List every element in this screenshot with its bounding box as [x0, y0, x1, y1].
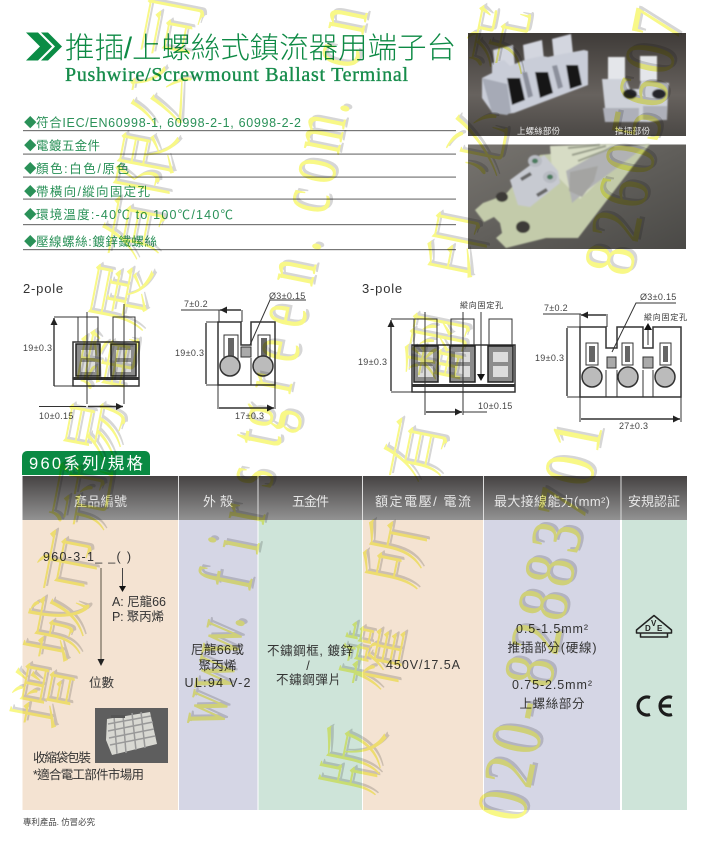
- column: housing: 尼龍66或: [191, 642, 244, 657]
- column: metal parts: [258, 520, 362, 810]
- material codes: [112, 594, 166, 624]
- panel: feature list: [23, 115, 456, 250]
- feature: plating: [23, 138, 456, 155]
- column: metal parts: 不鏽鋼彈片: [276, 672, 341, 687]
- arrow: to pole count: [98, 568, 104, 666]
- drawing: 2-pole front view: [23, 304, 139, 421]
- feature: standards: [23, 115, 456, 131]
- title: 推插/上螺絲式鎮流器用端子台: [65, 32, 456, 65]
- heading: 3-pole: 3-pole: [362, 281, 403, 296]
- feature: plating: 電鍍五金件: [36, 138, 100, 153]
- tab: series heading: 960系列/規格: [29, 454, 144, 473]
- column: wire capacity: 上螺絲部分: [520, 696, 585, 711]
- column: wire capacity: 0.75-2.5mm²: [512, 678, 592, 692]
- feature: screws: 壓線螺絲:鍍鋅鐵螺絲: [36, 234, 157, 249]
- watermark: company name: 增城市冠易電展有限公司: [6, 0, 220, 734]
- feature: colour: ◆: [24, 161, 37, 176]
- table header: 五金件: [292, 494, 329, 509]
- 3-pole terminal: [482, 34, 588, 115]
- table header: [22, 476, 687, 520]
- feature: fixing holes: 帶橫向/縱向固定孔: [36, 184, 150, 199]
- icon: VDE mark: [636, 616, 672, 637]
- dimension: height: 19±0.3: [175, 348, 204, 358]
- column: wire capacity: 推插部分(硬線): [508, 640, 596, 655]
- dimension: height: 19±0.3: [358, 357, 387, 367]
- footer note: 專利產品. 仿冒必究: [23, 817, 95, 827]
- column: safety approvals: [622, 520, 687, 810]
- icon: VDE mark: D: [645, 624, 651, 633]
- label: vertical fixing hole: 縱向固定孔: [460, 300, 503, 310]
- feature: screws: [23, 234, 456, 250]
- column: wire capacity: [484, 520, 620, 810]
- watermark: telephone: 020-82883701: [465, 413, 622, 825]
- dimension: total width: 27±0.3: [619, 421, 648, 431]
- watermark: second telephone: 82605607: [569, 3, 699, 281]
- packing note: 收縮袋包裝: [33, 750, 91, 765]
- table header: 最大接線能力(mm²): [494, 494, 610, 509]
- watermark: website: www.firstgreen.com.cn: [158, 0, 389, 732]
- feature: standards: ◆: [24, 115, 37, 130]
- dimension: width: 7±0.2: [544, 303, 568, 313]
- material codes: P: 聚丙烯: [112, 610, 164, 624]
- watermark: telephone: 020-82883701: [462, 415, 619, 827]
- watermark: website: www.firstgreen.com.cn: [155, 0, 386, 734]
- icon: CE mark: [638, 697, 672, 715]
- dimension: hole: Ø3±0.15: [269, 291, 306, 301]
- drawing: 3-pole front view: [358, 300, 515, 415]
- watermark: company name: 增城市冠易電展有限公司: [3, 0, 217, 736]
- feature: standards: 符合IEC/EN60998-1, 60998-2-1, 60998-2-2: [36, 115, 301, 130]
- dimension: height: 19±0.3: [23, 343, 52, 353]
- dimension: height: 19±0.3: [535, 353, 564, 363]
- column: wire capacity: 0.5-1.5mm²: [516, 622, 588, 636]
- column: rating: 450V/17.5A: [386, 658, 461, 672]
- column: housing: 聚丙烯: [198, 659, 236, 673]
- table header: 安規認証: [628, 494, 680, 509]
- label: vertical fixing hole: 縱向固定孔: [644, 312, 687, 322]
- watermark: second telephone: 82605607: [572, 1, 702, 279]
- feature: colour: [23, 161, 456, 178]
- feature: screws: ◆: [24, 234, 37, 249]
- feature: fixing holes: [23, 184, 456, 200]
- column: part number: [22, 520, 178, 810]
- column: housing: UL:94 V-2: [184, 676, 251, 690]
- table header: 外 殼: [203, 494, 233, 509]
- icon: VDE mark: E: [657, 624, 663, 633]
- column: metal parts: 不鏽鋼框, 鍍鋅: [267, 643, 353, 658]
- feature: temperature: [23, 207, 456, 225]
- drawing: 2-pole side view: [175, 291, 306, 421]
- feature: temperature: ◆: [24, 207, 37, 222]
- feature: plating: ◆: [24, 138, 37, 153]
- drawing: 3-pole side view: [535, 292, 687, 431]
- feature: temperature: 環境溫度:-40℃ to 100℃/140℃: [36, 207, 233, 222]
- photo: terminals: [468, 33, 686, 136]
- tab: series heading: [22, 451, 150, 475]
- icon: title chevrons: [26, 32, 62, 60]
- dimension: pitch: 10±0.15: [39, 411, 74, 421]
- subtitle: Pushwire/Screwmount Ballast Terminal: [65, 64, 408, 86]
- part number code: 960-3-1_ _( ): [43, 550, 131, 564]
- dimension: total width: 17±0.3: [235, 411, 264, 421]
- pole count label: 位數: [89, 675, 115, 690]
- table: specifications: [22, 476, 687, 810]
- icon: VDE mark: V: [651, 619, 657, 628]
- feature: fixing holes: ◆: [24, 184, 37, 199]
- dimension: hole: Ø3±0.15: [640, 292, 677, 302]
- 2-pole terminal: [602, 56, 669, 122]
- dimension: pitch: 10±0.15: [478, 401, 513, 411]
- column: metal parts: /: [306, 659, 310, 673]
- photo caption: push-in: 推插部份: [615, 126, 650, 136]
- feature: colour: 顏色:白色/原色: [36, 161, 129, 176]
- dimension: width: 7±0.2: [184, 299, 208, 309]
- table header: 額定電壓/ 電流: [375, 494, 471, 509]
- material codes: A: 尼龍66: [112, 594, 166, 609]
- table header: 產品編號: [74, 494, 127, 509]
- market note: *適合電工部件市場用: [33, 767, 144, 782]
- heading: 2-pole: 2-pole: [23, 281, 64, 296]
- column: rating: [363, 520, 483, 810]
- photo caption: screw: 上螺絲部份: [517, 126, 560, 136]
- arrow: to material: [119, 568, 126, 592]
- photo: shrink bag pack: [95, 708, 168, 763]
- photo: ballast application: [468, 144, 686, 249]
- column: housing: [179, 520, 258, 810]
